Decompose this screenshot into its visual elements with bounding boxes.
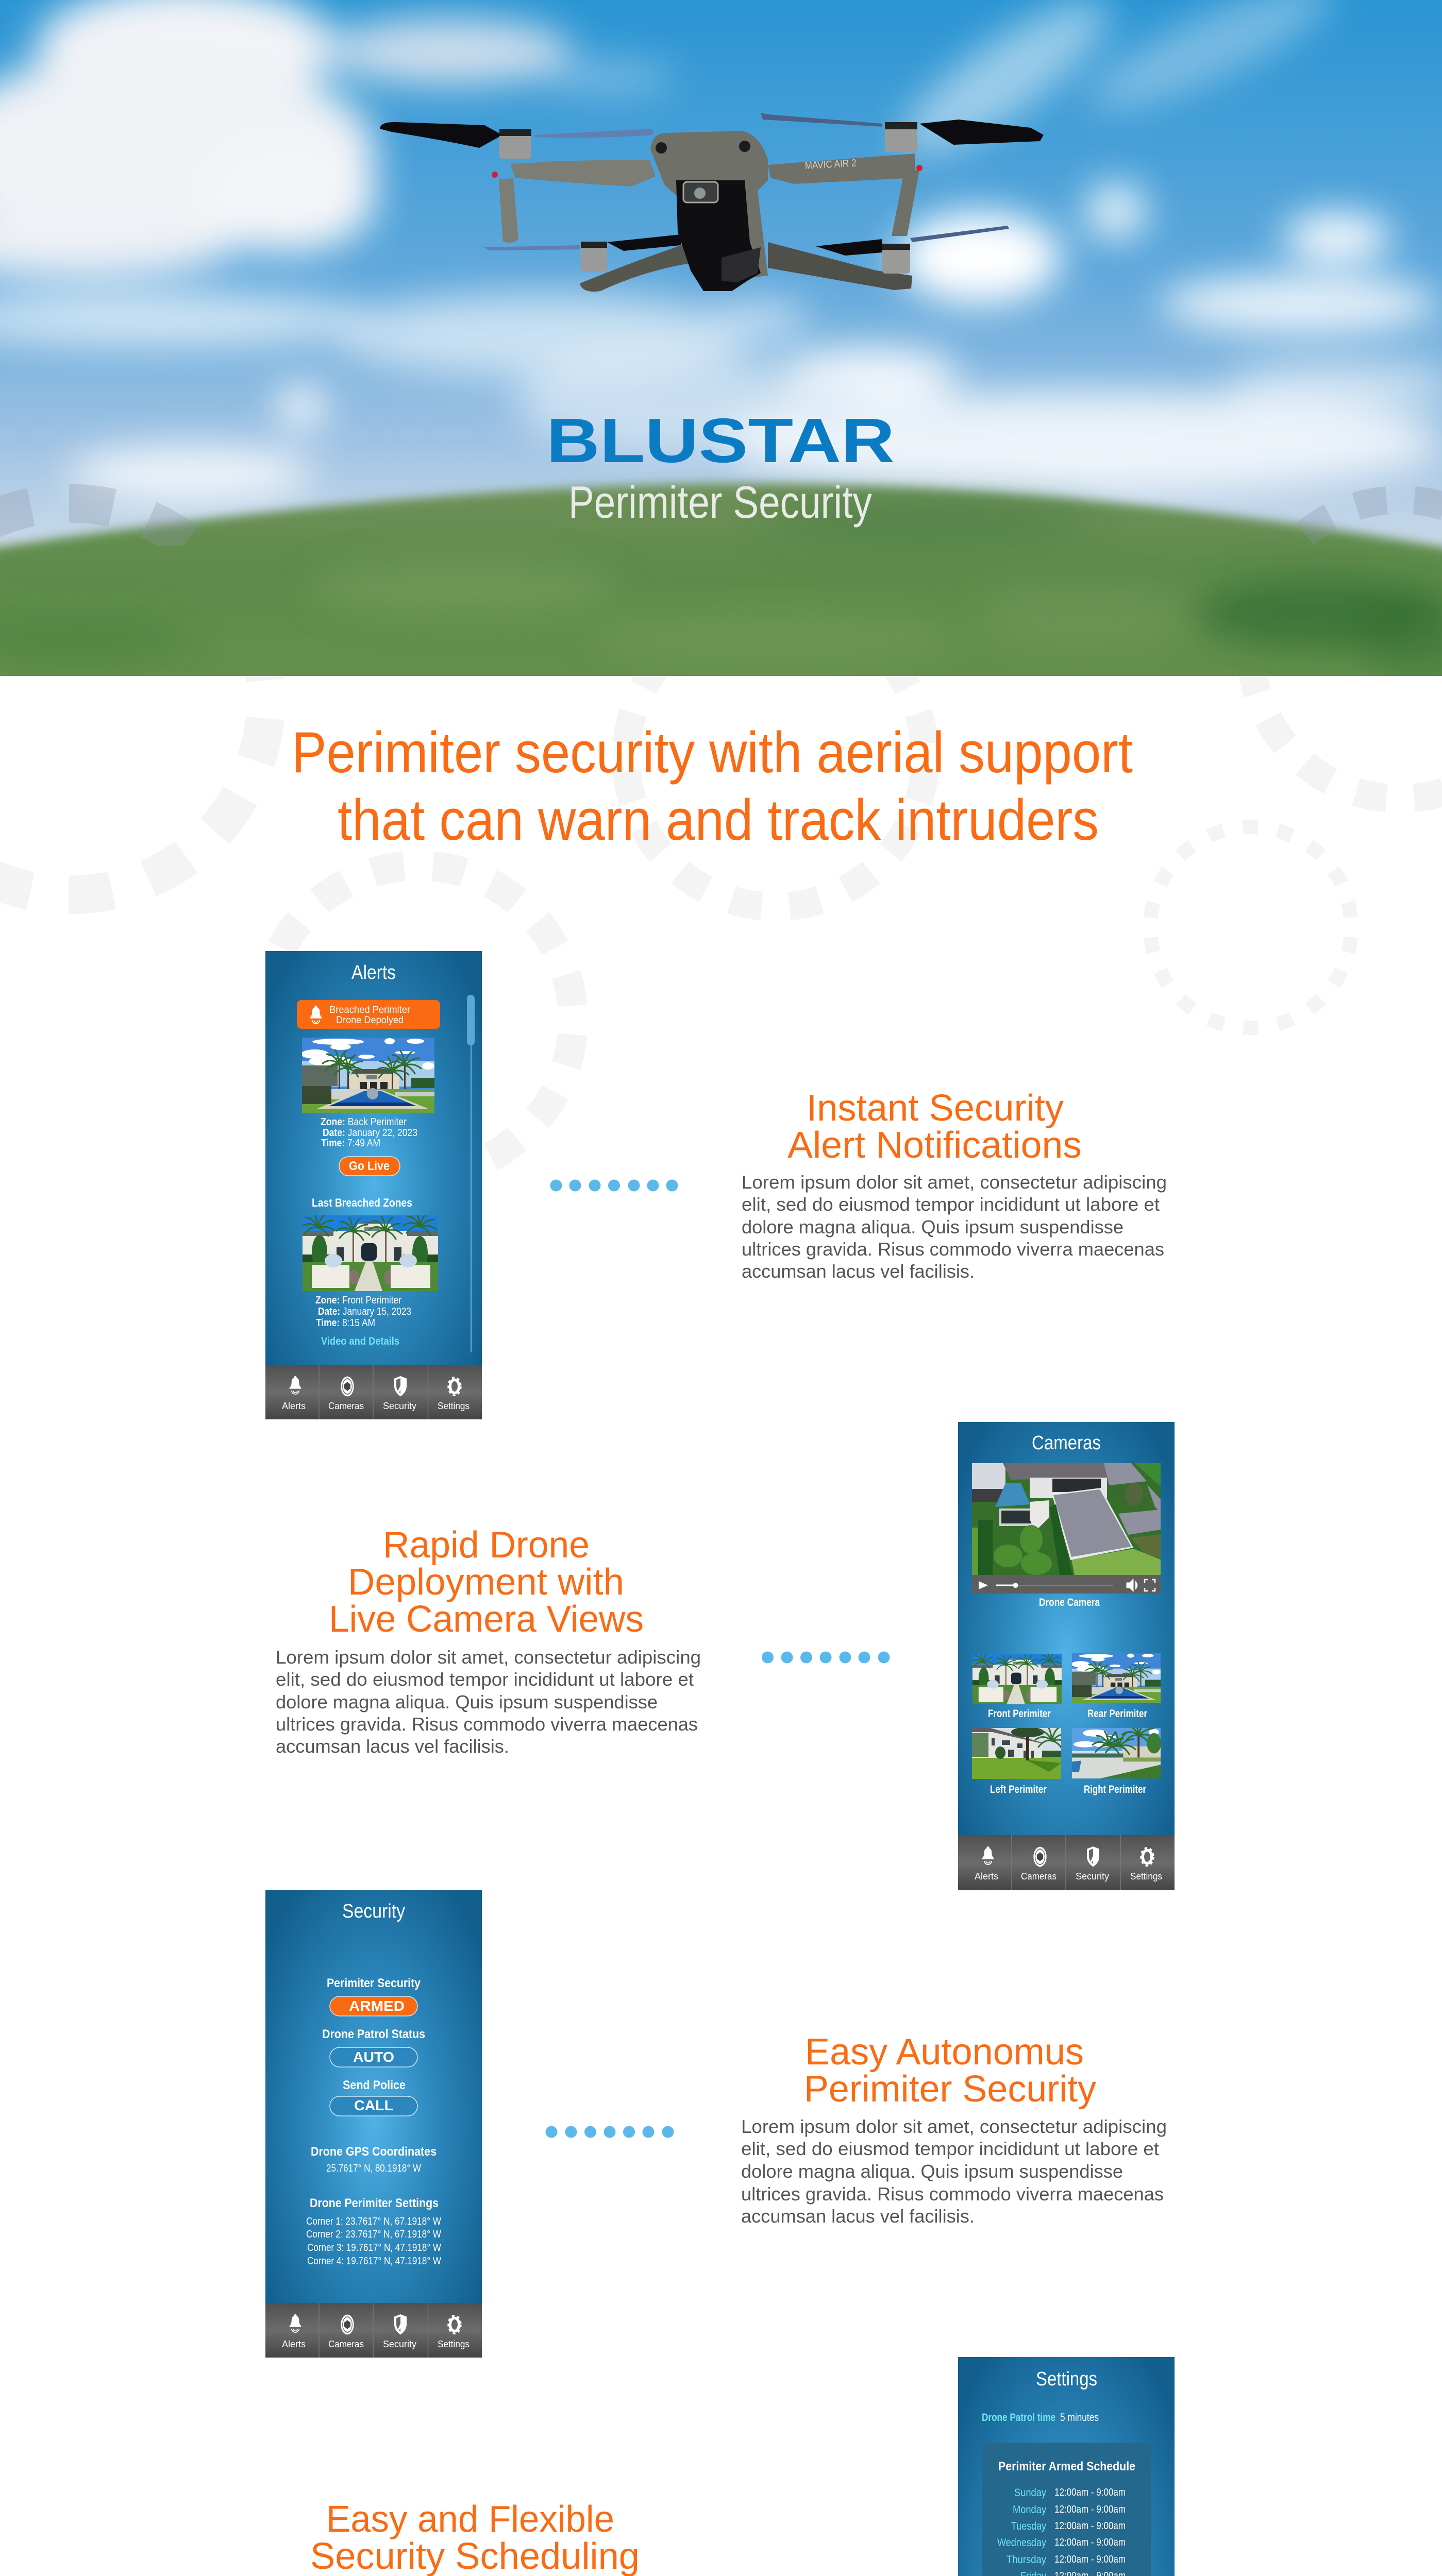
body text 3: accumsan lacus vel facilisis. (741, 2206, 975, 2227)
heading: instant alerts (787, 1088, 1082, 1166)
send police control: CALL (354, 2097, 393, 2113)
photo: back perimeter (302, 1038, 434, 1113)
tab bar: Cameras (328, 2339, 364, 2349)
schedule panel: 12:00am - 9:00am (1054, 2537, 1126, 2548)
tab bar: Security (383, 2339, 416, 2349)
camera thumbnails (972, 1652, 1161, 1779)
back perimeter details: Date: January 22, 2023 (323, 1127, 417, 1139)
perimeter settings: Corner 1: 23.7617° N, 67.1918° W (306, 2216, 441, 2227)
body text 1: elit, sed do eiusmod tempor incididunt ut labore et (742, 1194, 1160, 1215)
send police control (330, 2078, 417, 2116)
body text 1: dolore magna aliqua. Quis ipsum suspendisse (742, 1216, 1124, 1238)
tab bar: Settings (438, 1401, 470, 1411)
connector dots 2 (762, 1652, 890, 1663)
body text 2: ultrices gravida. Risus commodo viverra maecenas (276, 1714, 698, 1735)
drone patrol control: AUTO (353, 2049, 394, 2065)
scrollbar (467, 995, 475, 1352)
perimeter settings: Corner 4: 19.7617° N, 47.1918° W (307, 2256, 441, 2267)
body and camera (650, 131, 768, 278)
go live button (339, 1157, 400, 1176)
thumbnail labels: Right Perimiter (1084, 1784, 1146, 1795)
thumbnail labels: Rear Perimiter (1087, 1708, 1147, 1720)
thumbnail labels: Front Perimiter (988, 1708, 1051, 1720)
main headline: that can warn and track intruders (338, 788, 1099, 852)
schedule panel: 12:00am - 9:00am (1054, 2520, 1126, 2532)
thumbnail labels: Left Perimiter (990, 1784, 1047, 1795)
tab bar: Security (1076, 1871, 1109, 1882)
panel: security phone screen: Security (342, 1901, 405, 1922)
tab bar: Settings (438, 2339, 470, 2349)
heading: autonomous security (804, 2031, 1096, 2110)
heading: rapid deployment: Live Camera Views (329, 1599, 644, 1640)
perimeter security control: Perimiter Security (327, 1976, 421, 1990)
main headline: Perimiter security with aerial support (292, 720, 1133, 785)
heading: rapid deployment: Deployment with (348, 1562, 624, 1603)
tab bar (265, 1365, 482, 1419)
ring shadow over sky (0, 484, 1442, 546)
panel: alerts phone screen: Alerts (351, 962, 396, 984)
grass hill (0, 483, 1442, 696)
perimeter settings: Corner 3: 19.7617° N, 47.1918° W (307, 2242, 441, 2253)
body text 2: Lorem ipsum dolor sit amet, consectetur adipiscing (276, 1647, 701, 1668)
clouds (0, 0, 1442, 502)
patrol time: Drone Patrol time (982, 2412, 1055, 2424)
gps coordinates: 25.7617° N, 80.1918° W (326, 2163, 421, 2174)
heading: instant alerts: Instant Security (807, 1088, 1064, 1129)
body text 1: accumsan lacus vel facilisis. (742, 1261, 975, 1282)
schedule panel (982, 2443, 1151, 2576)
send police control: Send Police (343, 2078, 406, 2092)
back perimeter details: Time: 7:49 AM (321, 1138, 380, 1149)
schedule panel: Perimiter Armed Schedule (998, 2460, 1135, 2473)
hero photo: sky and grass hill (0, 0, 1442, 676)
alert banner (297, 1000, 440, 1029)
gps coordinates (311, 2145, 437, 2174)
schedule panel: Tuesday (1011, 2520, 1046, 2532)
tab bar: Alerts (282, 2339, 306, 2349)
photo: front perimeter (303, 1215, 438, 1291)
body text 3 (741, 2116, 1167, 2227)
drone (380, 113, 1044, 292)
heading: scheduling: Security Scheduling (310, 2536, 640, 2576)
drone patrol control (322, 2027, 425, 2067)
panel: cameras phone screen: Cameras (1032, 1432, 1101, 1454)
back perimeter details (321, 1116, 417, 1149)
body text 1: ultrices gravida. Risus commodo viverra maecenas (742, 1239, 1164, 1260)
front perimeter details: Date: January 15, 2023 (318, 1306, 411, 1317)
tab bar: Alerts (975, 1871, 998, 1882)
grass mottling (0, 497, 1442, 680)
heading: scheduling (310, 2499, 640, 2576)
body text 2 (276, 1647, 701, 1757)
panel: cameras phone screen (958, 1422, 1175, 1890)
body text 1 (742, 1172, 1167, 1282)
arms and legs (499, 154, 919, 292)
tab bar: Cameras (328, 1401, 364, 1411)
front perimeter details: Zone: Front Perimiter (315, 1295, 401, 1306)
background pattern: dashed rings upper (0, 500, 1442, 1175)
tab bar (958, 1835, 1175, 1890)
tab bar (265, 2303, 482, 2358)
body text 1: Lorem ipsum dolor sit amet, consectetur adipiscing (742, 1172, 1167, 1193)
back perimeter details: Zone: Back Perimiter (321, 1116, 407, 1128)
alert banner: Drone Depolyed (336, 1015, 404, 1026)
logo: BLUSTAR: BLUSTAR (546, 405, 895, 476)
video link: Video and Details (321, 1335, 399, 1347)
front perimeter details (315, 1295, 411, 1329)
schedule panel: 12:00am - 9:00am (1054, 2504, 1126, 2515)
heading: autonomous security: Easy Autonomus (805, 2031, 1084, 2073)
schedule panel: 12:00am - 9:00am (1054, 2554, 1126, 2565)
motors (499, 122, 917, 274)
heading: scheduling: Easy and Flexible (326, 2499, 614, 2540)
patrol time: 5 minutes (1060, 2412, 1099, 2424)
panel: security phone screen (265, 1890, 482, 2358)
go live button: Go Live (349, 1159, 390, 1173)
perimeter security control (327, 1976, 421, 2016)
schedule panel: Wednesday (997, 2537, 1046, 2549)
connector dots 1 (550, 1180, 678, 1191)
drone: MAVIC AIR 2 (804, 158, 857, 172)
body text 2: elit, sed do eiusmod tempor incididunt ut labore et (276, 1669, 694, 1690)
alert banner: Breached Perimiter (329, 1005, 411, 1015)
heading: autonomous security: Perimiter Security (804, 2069, 1096, 2110)
perimeter settings: Drone Perimiter Settings (310, 2196, 439, 2210)
heading: rapid deployment (329, 1524, 644, 1640)
body text 2: accumsan lacus vel facilisis. (276, 1736, 509, 1757)
main headline (292, 720, 1133, 852)
drone patrol control: Drone Patrol Status (322, 2027, 425, 2041)
logo subtitle: Perimiter Security (568, 477, 872, 528)
schedule panel: 12:00am - 9:00am (1054, 2487, 1126, 2498)
panel: settings phone screen (958, 2357, 1175, 2576)
body text 2: dolore magna aliqua. Quis ipsum suspendisse (276, 1691, 658, 1713)
front perimeter details: Time: 8:15 AM (316, 1317, 375, 1329)
thumbnail labels (988, 1708, 1147, 1795)
last breached zones: Last Breached Zones (312, 1196, 412, 1209)
body text 3: ultrices gravida. Risus commodo viverra maecenas (741, 2183, 1164, 2205)
connector dots 3 (545, 2126, 674, 2138)
heading: instant alerts: Alert Notifications (787, 1125, 1082, 1166)
schedule panel: Thursday (1007, 2554, 1046, 2566)
panel: settings phone screen: Settings (1036, 2368, 1097, 2390)
body text 3: Lorem ipsum dolor sit amet, consectetur adipiscing (741, 2116, 1167, 2137)
perimeter settings: Corner 2: 23.7617° N, 67.1918° W (306, 2229, 441, 2240)
body text 3: elit, sed do eiusmod tempor incididunt ut labore et (741, 2138, 1159, 2159)
panel: cameras phone screen: Drone Camera (1039, 1597, 1100, 1608)
schedule panel: Sunday (1014, 2487, 1046, 2499)
tab bar: Alerts (282, 1401, 306, 1411)
perimeter security control: ARMED (349, 1998, 405, 2014)
gps coordinates: Drone GPS Coordinates (311, 2145, 437, 2159)
schedule panel: Monday (1013, 2504, 1046, 2516)
body text 3: dolore magna aliqua. Quis ipsum suspendisse (741, 2161, 1123, 2182)
tab bar: Security (383, 1401, 416, 1411)
tab bar: Cameras (1021, 1871, 1057, 1882)
drone video (972, 1463, 1161, 1594)
panel: alerts phone screen (265, 951, 482, 1419)
rotor blades (380, 113, 1044, 256)
tab bar: Settings (1130, 1871, 1162, 1882)
perimeter settings (306, 2196, 441, 2267)
heading: rapid deployment: Rapid Drone (383, 1524, 590, 1566)
